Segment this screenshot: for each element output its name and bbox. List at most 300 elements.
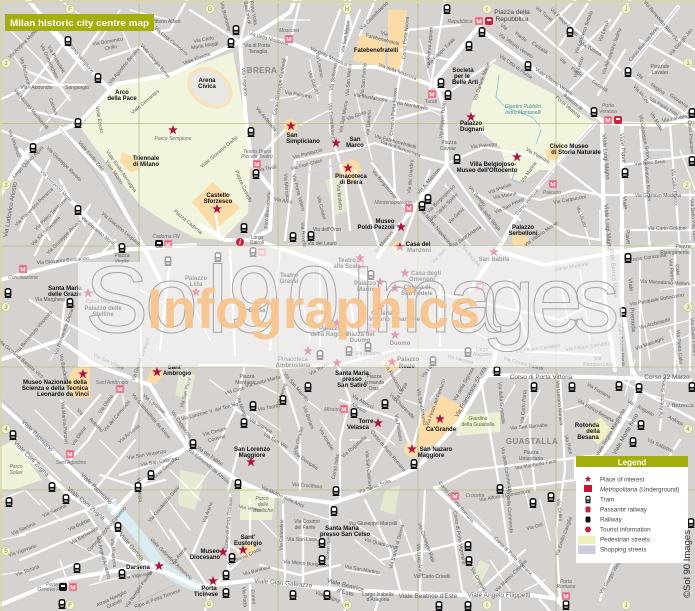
- grid reference markers: 4: [686, 427, 690, 433]
- place: Casa degli Omenoni: [400, 268, 441, 283]
- street labels: Via Larga: [393, 382, 409, 403]
- street labels: Via Cesare Battisti: [503, 356, 544, 372]
- street labels: Sangiorgio: [65, 85, 89, 91]
- place: Palazzo Reale: [387, 357, 419, 370]
- street labels: Via Pantano: [393, 414, 403, 442]
- street labels: Via Carlo Crivelli: [414, 574, 450, 580]
- street labels: Via Cesare: [202, 426, 228, 438]
- street labels: Via Crocifisso: [292, 482, 323, 490]
- street labels: Viale Coni Zugna: [12, 440, 51, 479]
- stations and italic labels: Repubblica: [447, 19, 473, 25]
- street labels: Via dei Giardini: [407, 160, 415, 194]
- place: Arena Civica: Civica: [198, 84, 216, 90]
- street labels: Via Palestro: [470, 142, 498, 150]
- street labels: Via Lecco: [573, 56, 586, 79]
- street labels: Via Sant'Antonio: [415, 388, 427, 426]
- street labels: Foro Buonaparte: [263, 191, 273, 229]
- street labels: Via dell'Orso: [313, 227, 341, 233]
- street labels: Via San Vittore: [92, 352, 125, 372]
- place: Arena Civica: Arena: [198, 78, 216, 84]
- street labels: Via Quadronno: [363, 537, 397, 551]
- area: Palazzo Reale: [380, 355, 400, 372]
- place: Palazzo Litta: [185, 276, 207, 296]
- grid reference markers: F: [68, 7, 72, 13]
- street labels: Ripa di Porta Ticinese: [134, 588, 182, 610]
- street labels: Via San Primo: [494, 197, 525, 216]
- place: Arena Civica: [198, 78, 216, 90]
- place: Museo Poldi-Pezzoli: Poldi-Pezzoli: [357, 225, 395, 231]
- street labels: Via Castelfidardo: [359, 1, 390, 32]
- stations and italic labels: Conciliazione: [8, 275, 38, 281]
- place: Palazzo Litta: Palazzo: [185, 276, 207, 282]
- street labels: Via San Marco: [345, 63, 353, 96]
- street labels: Via Bambaia: [242, 564, 271, 578]
- street labels: Via Andrea Maffei: [7, 28, 39, 60]
- street labels: Via San Fermo: [360, 63, 368, 97]
- stations and italic labels: Porta: [46, 582, 58, 588]
- street labels: Via Pietro Tamburini: [33, 196, 69, 232]
- place: Sant'Ambrogio: [152, 365, 191, 377]
- place: Castello Sforzesco: [204, 193, 233, 213]
- street labels: Via dell'Annunciata: [379, 139, 421, 159]
- place: Museo Diocesano: Diocesano: [190, 555, 221, 561]
- place: Galleria Vittorio Emanuele: [369, 302, 425, 323]
- place: Palazzo Marino: Palazzo: [354, 281, 376, 287]
- street labels: Castaldi: [590, 79, 609, 94]
- street labels: Via della Spiga: [476, 203, 502, 232]
- street labels: Via Gaudenzio Gioio: [147, 485, 181, 524]
- shopping streets: [0, 7, 678, 503]
- street labels: Via: [558, 57, 567, 66]
- street labels: Via Marina: [520, 161, 539, 184]
- street labels: Via Cappuccini: [553, 194, 587, 206]
- street labels: Corso Magenta: [86, 299, 120, 305]
- street labels: Porta Volta: [248, 0, 258, 26]
- street labels: Via: [380, 30, 389, 38]
- street labels: Via Bramante: [218, 1, 232, 32]
- street labels: Viale Angelo Filippetti: [468, 592, 531, 599]
- street labels: Via Calatafimi: [278, 519, 286, 550]
- street labels: Via San Luca: [287, 537, 317, 543]
- place: Museo Diocesano: [190, 547, 228, 561]
- street labels: Via Lecco: [598, 20, 611, 43]
- street labels: Fatebenefratelli: [365, 33, 400, 47]
- street labels: Via Luigi Anelli: [415, 543, 423, 576]
- legend: passante railway: Passante railway: [600, 506, 648, 514]
- legend header: Legend: [618, 458, 646, 467]
- street labels: Corso Genova: [150, 456, 179, 482]
- place: San Lorenzo Maggiore: Maggiore: [239, 453, 266, 459]
- street labels: Via Olona: [70, 426, 88, 447]
- street labels: Via Lambro: [662, 114, 688, 124]
- street labels: Via Legnano: [240, 68, 248, 96]
- stations and italic labels: Genova FS: [37, 587, 63, 593]
- place: San Nazaro Maggiore: Maggiore: [418, 453, 445, 459]
- place: Piazza del Duomo: Duomo: [350, 338, 371, 344]
- street labels: del Fante: [295, 525, 316, 531]
- street labels: Viale Papiniano: [20, 419, 54, 454]
- stations and italic labels: Parco: [255, 496, 269, 502]
- street labels: Via Marghera: [35, 297, 65, 303]
- street labels: Via Borgospesso: [426, 184, 457, 215]
- street labels: Via di Porta: [244, 43, 270, 49]
- place: Palazzo Serbelloni: Palazzo: [512, 225, 534, 231]
- place: Casa del Manzoni: Manzoni: [407, 248, 431, 254]
- stations and italic labels: Indro Montanelli: [505, 110, 542, 116]
- district names: [247, 66, 558, 446]
- street labels: Via Solferino: [329, 62, 339, 91]
- legend: tram: Tram: [600, 496, 614, 504]
- place: Palazzo Dugnani: Dugnani: [460, 127, 484, 133]
- street labels: Via Vigevano: [8, 543, 38, 559]
- street labels: Via Sabotino: [646, 437, 675, 455]
- street labels: Via Carlo Poerio: [669, 169, 679, 205]
- metro stations: M: [341, 406, 347, 413]
- street labels: Via Stampa: [248, 417, 273, 435]
- place: Ca' Grande: [426, 414, 457, 433]
- street labels: Via Giuseppe Rovani: [46, 219, 83, 256]
- street labels: Corso Italia: [325, 534, 333, 560]
- street labels: Via Disciplini: [292, 451, 319, 472]
- place: Piazza del Duomo: Piazza del: [346, 332, 375, 338]
- places of interest: [22, 48, 601, 598]
- street labels: Anfossi: [667, 414, 684, 428]
- legend: metropolitana: Metropolitana (Underground): [600, 486, 679, 494]
- street labels: Viale Giovanni Gadio: [199, 135, 239, 170]
- place: Palazzo della Ragione: Palazzo: [319, 326, 341, 332]
- Piazza della Repubblica label: [494, 9, 530, 23]
- street labels: d'Aragona: [367, 597, 390, 603]
- street labels: Via Fontana: [585, 382, 612, 401]
- area: Castello Sforzesco: [192, 182, 240, 230]
- place: Palazzo Reale: Palazzo: [397, 357, 419, 363]
- street labels: Via Carlo Porta: [520, 390, 528, 424]
- place: Palazzo della Ragione: [310, 318, 350, 338]
- street labels: Via Enrico Besana: [576, 398, 615, 424]
- street labels: Piazza: [441, 140, 457, 146]
- place: Torre Velasca: [347, 418, 383, 431]
- street labels: Via Marina: [487, 182, 512, 196]
- place: Museo Poldi-Pezzoli: Museo: [375, 219, 395, 225]
- street labels: Correnti: [207, 434, 226, 444]
- place: Societa per le Belle Arti: per le: [454, 74, 471, 80]
- street labels: Via San Martino: [344, 564, 380, 576]
- street labels: Piazza Castello: [233, 170, 253, 204]
- stations and italic labels: Cadorna FN: [152, 234, 180, 240]
- street labels: Diaz: [369, 386, 379, 392]
- area: Ca' Grande: [418, 395, 463, 447]
- street labels: Cirillo: [104, 44, 118, 52]
- street labels: Corso di Porta Nuova: [389, 88, 399, 136]
- street labels: Via Pietro: [667, 259, 675, 281]
- street labels: Via Olmetto: [293, 426, 305, 453]
- street labels: Bastioni di: [562, 93, 583, 112]
- street labels: Via Daverio: [365, 110, 373, 136]
- street labels: Viale Milano: [104, 160, 124, 185]
- legend: railway: Railway: [600, 516, 623, 524]
- street labels: Via Vittorio Mosse: [523, 220, 560, 248]
- place: Parco Sempione star: [168, 125, 178, 134]
- street labels: Via Cusani: [315, 195, 327, 220]
- grid reference markers: 4: [4, 427, 8, 433]
- street labels: Via: [594, 356, 602, 362]
- street labels: Piazzale: [651, 64, 670, 70]
- place: Societa per le Belle Arti: Società: [452, 68, 474, 74]
- place: Santa Maria delle Grazie: delle Grazie: [48, 292, 83, 298]
- street labels: Via Giuseppe Ripa: [416, 522, 436, 563]
- legend: pedestrian streets: Pedestrian streets: [600, 536, 650, 544]
- place: Pinacoteca Ambrosiana: Pinacoteca: [278, 357, 309, 363]
- street labels: Via Andrea Appiani: [425, 27, 435, 69]
- icon: tourist information: i: [239, 240, 242, 246]
- grid reference markers: F: [68, 603, 72, 609]
- place: Galleria Vittorio Emanuele: Vittorio Emanuele II: [369, 317, 425, 323]
- metro stations: M: [429, 91, 435, 98]
- street labels: Viale Luigi Majno: [600, 134, 610, 181]
- street labels: Giovanna: [668, 93, 689, 110]
- street labels: Via della Moscova: [309, 46, 348, 68]
- street labels: Via Turati: [534, 5, 554, 23]
- place: Piazza del Duomo: [346, 332, 375, 344]
- street labels: Via Porta: [240, 586, 248, 608]
- street labels: Via San Calimero: [363, 450, 373, 490]
- legend: place of interest: Place of interest: [600, 476, 645, 484]
- street labels: Via Santa Sofia: [357, 478, 392, 496]
- grid reference markers: I: [486, 603, 488, 609]
- street labels: V. Bezzecca: [666, 403, 694, 409]
- street labels: Via Giacomo Leopardi: [100, 211, 141, 247]
- street labels: Piave: [623, 229, 631, 245]
- stations and italic labels: Giardini Pubblici: [505, 104, 542, 110]
- street labels: Via Alfonso Lamarmora: [479, 489, 531, 503]
- grid reference markers: H: [345, 7, 349, 13]
- street labels: Via Gorizia: [135, 478, 143, 503]
- place: Duomo: Duomo: [390, 341, 411, 347]
- street labels: Via Verri: [431, 248, 448, 265]
- street labels: Viale Ervolo: [94, 106, 104, 134]
- metro stations: M: [254, 161, 260, 168]
- street labels: Via Ausonio: [117, 423, 142, 445]
- street labels: Piazza: [239, 374, 255, 380]
- area: Palazzo Serbelloni: [512, 232, 528, 248]
- Piazza della Repubblica label: Piazza della: [494, 9, 530, 16]
- street labels: Via Giambattista da Arese: [130, 392, 172, 441]
- street labels: Piazza: [114, 253, 130, 259]
- metro stations: M: [476, 18, 482, 25]
- street labels: Via Cellini: [555, 499, 563, 521]
- legend items: [578, 476, 679, 554]
- grid reference markers: 2: [4, 183, 8, 189]
- street labels: Via: [75, 408, 85, 417]
- street labels: Via Goito: [346, 110, 368, 122]
- street labels: Via Bandello: [58, 354, 68, 382]
- place: Teatro alla Scala: Teatro: [338, 258, 356, 264]
- watermark: Sol 90 Images: Sol90Images: [85, 247, 620, 353]
- park: Parco Sempione: [80, 52, 250, 240]
- stations and italic labels: Sant'Agostino: [56, 460, 87, 466]
- place: Palazzo della Ragione: della Ragione: [310, 332, 350, 338]
- street labels: Via Bagutta: [460, 245, 481, 268]
- place: Museo Diocesano: Museo: [200, 549, 220, 555]
- street labels: Corso Cristoforo Colombo: [86, 505, 128, 553]
- stations and italic labels: Romana: [557, 584, 576, 590]
- street labels: Via della Commenda: [499, 446, 513, 493]
- street labels: Via Massena: [109, 538, 117, 568]
- street labels: Via Vetere: [238, 504, 262, 514]
- street labels: Via Borgonuovo: [370, 169, 398, 200]
- place: Teatro alla Scala: alla Scala: [333, 264, 361, 270]
- stations and italic labels: Crocetta: [466, 493, 485, 499]
- street labels: Via Orseolo: [469, 567, 487, 592]
- street labels: Via Circo: [224, 385, 245, 397]
- street labels: Via Larga: [420, 359, 439, 379]
- street labels: Piazza: [523, 450, 539, 456]
- street labels: Corso di Porta Vittoria: [510, 374, 573, 381]
- street labels: Via Lanzone V. del Torchio: [181, 401, 239, 423]
- place: Pinacoteca di Brera: Pinacoteca: [335, 174, 368, 180]
- stations and italic labels: Porta: [560, 579, 572, 585]
- street labels: Via San Marco: [338, 100, 350, 133]
- place: San Marco: San: [349, 137, 361, 143]
- street labels: Via Città di Fiume: [498, 53, 534, 81]
- street labels: Via Niccolò Machiavelli: [12, 88, 49, 131]
- street labels: Cavour: [440, 146, 456, 152]
- place: Palazzo delle Stelline: Palazzo delle: [84, 306, 122, 312]
- stations and italic labels: Parco Sempione: [155, 136, 192, 142]
- street labels: Via Marina: [493, 191, 517, 201]
- street labels: Via Olona: [97, 394, 115, 415]
- street labels: Via Orti: [526, 522, 544, 532]
- street labels: Via San Maurilio: [282, 372, 310, 403]
- street labels: Via della Signora: [452, 366, 476, 402]
- street labels: Via: [635, 72, 644, 81]
- street labels: Viale Coni Zugna: [66, 486, 107, 522]
- street labels: Piazza: [366, 374, 382, 380]
- street labels: Via Sant'Andrea: [450, 224, 483, 250]
- street labels: Via Bobbio: [67, 517, 92, 533]
- place: Castello Sforzesco: Sforzesco: [204, 199, 233, 205]
- street labels: Tenaglia: [249, 49, 268, 55]
- copyright credit: ©Sol 90 Images: [682, 529, 692, 598]
- place: San Babila: [479, 247, 510, 263]
- street labels: Via Santa Marta: [245, 374, 281, 390]
- street labels: Viale Gorizia: [117, 531, 145, 563]
- park: Giardino della Guastalla: [456, 412, 500, 436]
- street labels: Via Carlo Goldoni: [647, 226, 687, 232]
- street labels: Maria Maggi: [191, 41, 219, 51]
- stations and italic labels: Basiliche: [253, 508, 273, 514]
- street labels: Via Bianca di Savoia: [388, 524, 406, 570]
- place: Triennale di Milano: di Milano: [133, 162, 159, 168]
- street labels: Via Marco Burigozzo: [283, 559, 329, 569]
- grid reference markers: G: [207, 602, 212, 608]
- place: Teatro Grassi: [280, 273, 299, 285]
- street labels: Viale: [626, 278, 634, 292]
- place: Casa degli Omenoni: Omenoni: [409, 277, 435, 283]
- street labels: Viale Piave: [618, 133, 626, 164]
- street labels: Via Arena: [170, 546, 189, 567]
- street labels: Via Filippo Turati: [426, 37, 457, 68]
- street labels: Via Marina Panzeri: [59, 402, 69, 444]
- street labels: Via Giosuè Carducci: [130, 337, 152, 382]
- place: Duomo: [390, 330, 411, 347]
- street labels: Via Bernardino Zaccaria: [53, 303, 77, 356]
- place: Rotonda della Besana: della: [586, 429, 600, 435]
- metro stations: M: [357, 261, 363, 268]
- street labels: Via Pietro Calvi: [675, 330, 683, 364]
- street labels: Corso Italia: [331, 454, 341, 480]
- street labels: Via Archimede: [638, 317, 671, 331]
- place: San Nazaro Maggiore: San Nazaro: [420, 447, 453, 453]
- place: San Simpliciano: Simpliciano: [286, 139, 320, 145]
- street labels: Viale Gian Galeazzo: [254, 577, 313, 590]
- place: Civico Museo di Storia Naturale: [550, 144, 601, 156]
- place: Fatebenefratelli: Fatebenefratelli: [354, 48, 398, 54]
- street labels: Pardo: [513, 31, 528, 44]
- metro stations: M: [70, 584, 76, 591]
- street labels: Via San Vito: [262, 432, 289, 451]
- street labels: Viale Cervantes: [130, 88, 161, 116]
- street labels: Via Filippo Corridoni: [515, 343, 561, 355]
- place: Palazzo Serbelloni: Serbelloni: [508, 231, 538, 237]
- place: Darsena: [126, 561, 164, 571]
- place: Palazzo Reale: Reale: [399, 364, 416, 370]
- water lines: [496, 75, 541, 183]
- district: Guastalla: GUASTALLA: [506, 437, 558, 446]
- street labels: Via Tivoli: [256, 164, 277, 174]
- area: Casa del Manzoni: [392, 241, 404, 253]
- street labels: Grande: [106, 598, 124, 610]
- place: Torre Velasca: Velasca: [347, 425, 370, 431]
- street labels: Via Barbavara: [69, 526, 100, 547]
- street labels: Via della Guastalla: [496, 382, 506, 424]
- area: Civico Museo: [545, 145, 562, 160]
- street labels: Via Arco: [274, 196, 293, 206]
- street labels: Via Giorgio Vasari: [599, 558, 624, 595]
- metro stations: M: [67, 451, 73, 458]
- street labels: Via Molino delle Armi: [260, 485, 305, 510]
- watermark band: [78, 246, 622, 367]
- street labels: Via Palermo: [284, 90, 312, 100]
- street labels: Via Torino: [308, 361, 331, 377]
- place: Triennale di Milano: [133, 156, 160, 168]
- street labels: Viale Papiniano: [79, 472, 113, 507]
- street labels: Via: [499, 23, 508, 32]
- street labels: Via: [20, 85, 28, 91]
- area: Fatebenefratelli: [388, 10, 407, 70]
- park: Parco Solari: [0, 440, 42, 490]
- street labels: Piazza Cadorna: [172, 209, 203, 236]
- place: Arco della Pace: Arco: [115, 90, 129, 96]
- street labels: Pardo: [569, 66, 584, 79]
- street labels: Via Savona: [11, 521, 37, 537]
- street labels: Via Naviglio Pavese: [124, 569, 154, 609]
- street labels: Viale Luigi Majno: [602, 204, 612, 251]
- street labels: Umanitaria: [519, 456, 543, 462]
- place: Civico Museo di Storia Naturale: Civico Museo: [550, 144, 589, 150]
- street labels: Via Agostino Bertani: [107, 47, 141, 86]
- street labels: Corso Sempione: [66, 42, 95, 75]
- grid reference markers: 5: [4, 549, 8, 555]
- stations and italic labels: Palestro: [543, 190, 561, 196]
- place: Porta Ticinese: [194, 576, 219, 598]
- street labels: Via San Barnaba: [510, 422, 548, 432]
- stations and italic labels: Venezia: [599, 109, 617, 115]
- railway: [0, 110, 175, 605]
- street labels: Premuda: [628, 308, 636, 333]
- street labels: Via Monte Napoleone: [418, 207, 454, 248]
- street labels: Via Broletto: [335, 184, 343, 210]
